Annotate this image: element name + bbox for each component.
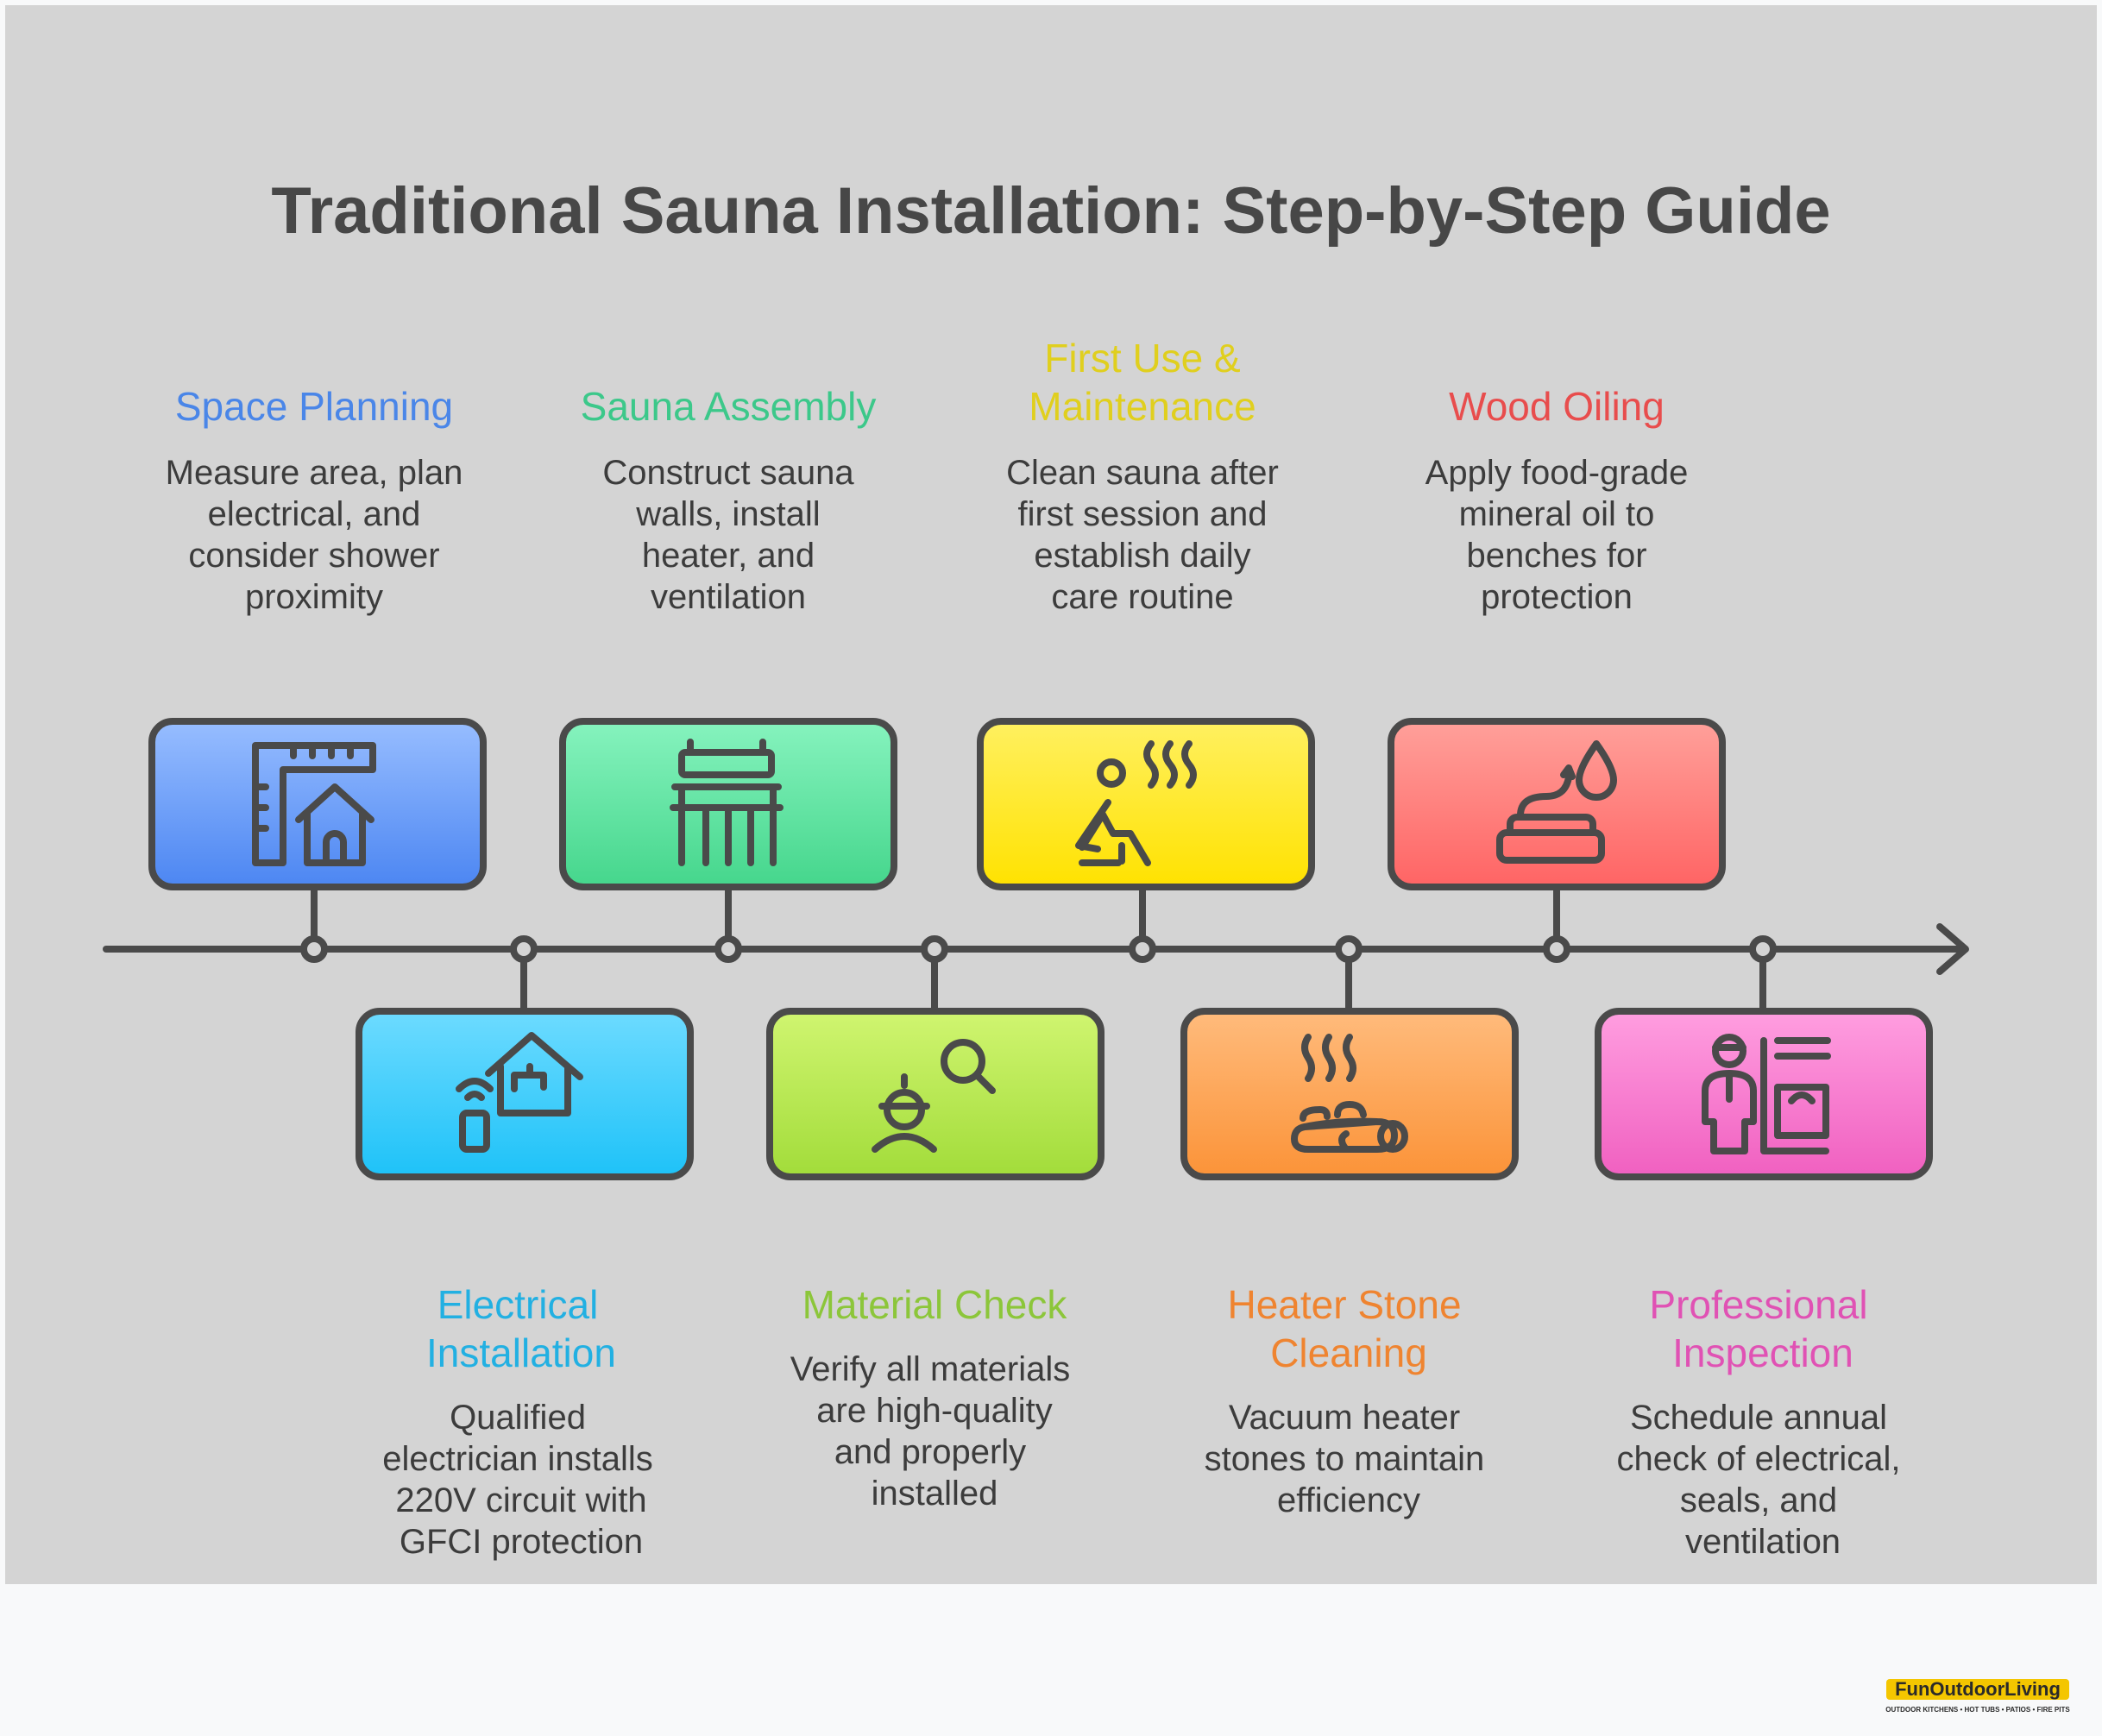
step: Heater Stone Cleaning: Vacuum heater [1229, 1399, 1460, 1437]
step: Material Check: and properly [834, 1433, 1026, 1471]
step: Space Planning: consider shower [188, 537, 440, 575]
step: Material Check: are high-quality [816, 1392, 1053, 1430]
step: First Use [980, 336, 1312, 887]
step: Professional Inspection: check of electrical, [1616, 1440, 1901, 1478]
step: Electrical Installation: Qualified [450, 1399, 586, 1437]
step: First Use: Clean sauna after [1006, 454, 1279, 492]
step: Wood Oiling: benches for [1466, 537, 1647, 575]
step: Wood Oiling: protection [1481, 578, 1633, 616]
step: Space Planning: proximity [245, 578, 383, 616]
step: First Use: First Use & [1044, 336, 1241, 381]
step: Heater Stone Cleaning: stones to maintain [1205, 1440, 1484, 1478]
step: Electrical Installation: Installation [426, 1330, 616, 1375]
step: Material Check [770, 1011, 1101, 1513]
step: Wood Oiling: mineral oil to [1459, 495, 1654, 533]
timeline [106, 887, 1966, 1010]
step: Electrical Installation: GFCI protection [400, 1523, 643, 1561]
step: First Use: Maintenance [1029, 384, 1256, 429]
step: Heater Stone Cleaning [1184, 1011, 1515, 1519]
step: Professional Inspection: Professional [1649, 1282, 1868, 1327]
step: Sauna Assembly [563, 384, 894, 887]
step: Electrical Installation: electrician installs [382, 1440, 653, 1478]
logo: OUTDOOR KITCHENS • HOT TUBS • PATIOS • FIRE PITS [1885, 1706, 2070, 1714]
step: Space Planning: electrical, and [208, 495, 420, 533]
step: Space Planning [152, 384, 483, 887]
step: Professional Inspection [1598, 1011, 1929, 1561]
step: Heater Stone Cleaning: Heater Stone [1227, 1282, 1462, 1327]
step: First Use: establish daily [1034, 537, 1251, 575]
step: Heater Stone Cleaning: Cleaning [1270, 1330, 1427, 1375]
step: Heater Stone Cleaning: efficiency [1277, 1481, 1420, 1519]
step: Sauna Assembly: heater, and [642, 537, 815, 575]
step: Professional Inspection: Inspection [1672, 1330, 1853, 1375]
step: Professional Inspection: Schedule annual [1630, 1399, 1887, 1437]
step: Sauna Assembly: ventilation [651, 578, 806, 616]
title: Traditional Sauna Installation: Step-by-Step Guide [271, 174, 1831, 248]
step: Material Check: Material Check [802, 1282, 1067, 1327]
step: Electrical Installation: Electrical [437, 1282, 598, 1327]
step: Sauna Assembly: Construct sauna [602, 454, 854, 492]
step: Space Planning: Space Planning [175, 384, 453, 429]
logo: FunOutdoorLiving [1895, 1678, 2061, 1700]
step: Sauna Assembly: Sauna Assembly [581, 384, 876, 429]
step: Electrical Installation [359, 1011, 690, 1561]
step: Material Check: installed [872, 1475, 998, 1513]
logo [1885, 1678, 2070, 1714]
step: Professional Inspection: seals, and [1680, 1481, 1837, 1519]
step: First Use: first session and [1017, 495, 1268, 533]
step: Electrical Installation: 220V circuit with [395, 1481, 647, 1519]
step: Wood Oiling: Apply food-grade [1425, 454, 1688, 492]
step: Material Check: Verify all materials [790, 1350, 1070, 1388]
step: Wood Oiling: Wood Oiling [1449, 384, 1665, 429]
step: Wood Oiling [1391, 384, 1722, 887]
step: Sauna Assembly: walls, install [635, 495, 821, 533]
step: Space Planning: Measure area, plan [166, 454, 463, 492]
step: Professional Inspection: ventilation [1685, 1523, 1841, 1561]
step: First Use: care routine [1051, 578, 1234, 616]
